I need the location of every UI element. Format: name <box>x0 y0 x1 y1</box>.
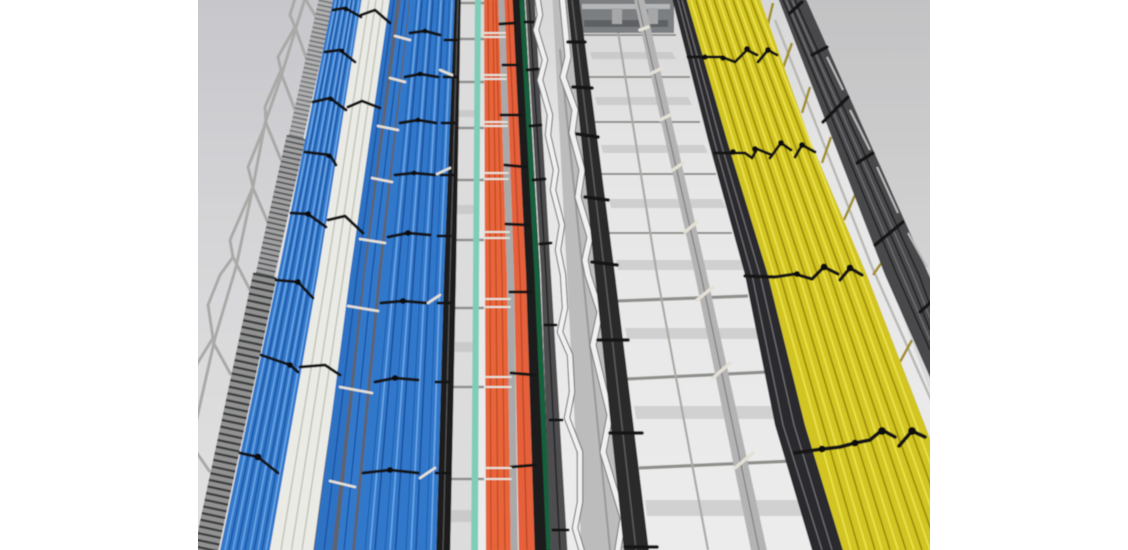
black and green cables <box>512 0 552 550</box>
grey cable pair center <box>632 0 769 550</box>
second orange bundle <box>504 0 535 550</box>
wavy silver wires <box>536 0 623 550</box>
tray rungs <box>447 0 793 550</box>
tray mounting bracket <box>578 0 674 33</box>
black cable ties <box>240 2 930 547</box>
wall background <box>190 0 940 550</box>
thin blue cable strands <box>313 0 410 550</box>
left wire mesh basket <box>192 0 316 472</box>
right dark grey cable bundle <box>778 0 930 379</box>
photo: structured cabling in wire mesh trays <box>198 0 930 550</box>
main blue cable bundle <box>354 0 455 550</box>
white cable bundle <box>268 0 392 550</box>
black cable tie heads <box>254 6 916 473</box>
black cables beside blue bundle <box>436 0 461 550</box>
orange cable bundle <box>484 0 511 550</box>
mint cable <box>471 0 481 550</box>
yellow cable bundle <box>686 0 930 550</box>
grey cable in orange bundle <box>498 0 518 550</box>
white cable ties <box>330 27 753 487</box>
tray shadows <box>448 52 805 522</box>
dark grey cable pair <box>525 0 568 550</box>
black cable bundle center <box>566 0 650 550</box>
left blue cable bundle <box>218 0 363 550</box>
right wire mesh basket <box>767 3 940 420</box>
dark gap behind thin blue strands <box>312 0 412 550</box>
flexible metal conduit <box>204 0 328 550</box>
black cable bundle beside yellow <box>670 0 846 550</box>
